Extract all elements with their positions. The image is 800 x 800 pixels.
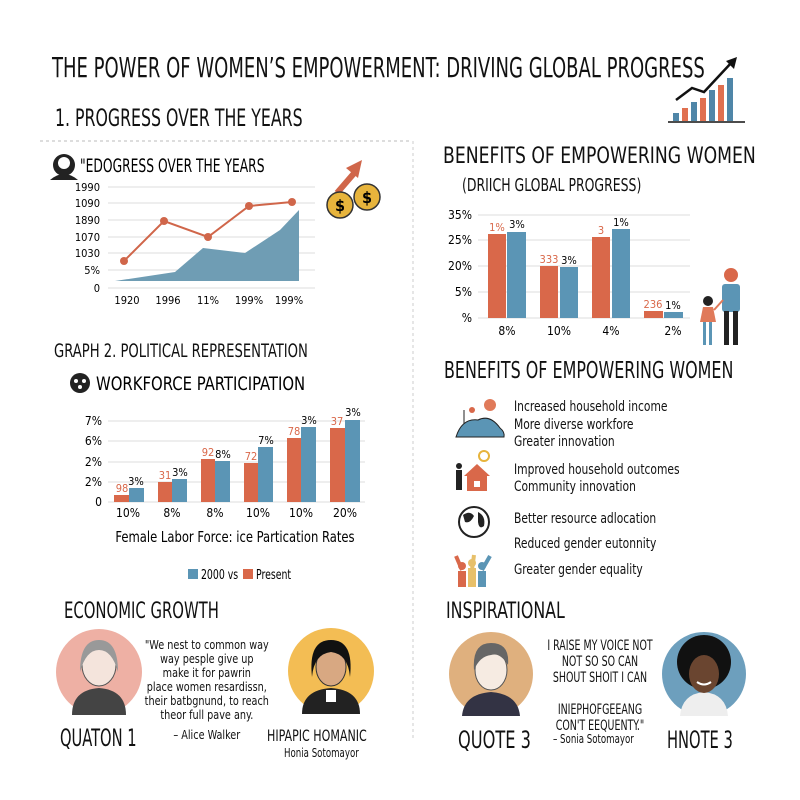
icon: woman avatar [50, 154, 78, 180]
chart: benefits bars: 10% [547, 324, 571, 338]
chart: progress line/area: "EDOGRESS OVER THE YEARS [80, 155, 265, 177]
chart: progress line/area: 11% [197, 294, 219, 307]
text: Honia Sotomayor [284, 746, 359, 760]
chart: workforce participation bars: 2000 vs [201, 567, 238, 582]
benefits list: Improved household outcomes [514, 462, 680, 478]
subheading: (DRIICH GLOBAL PROGRESS) [462, 175, 641, 196]
chart: progress line/area: 1090 [75, 197, 100, 210]
chart: workforce participation bars: 7% [85, 414, 102, 428]
chart: benefits bars: 3 [598, 224, 604, 237]
chart: workforce participation bars: 20% [333, 506, 357, 520]
chart: workforce participation bars: 3% [128, 475, 144, 488]
label: quote 3: QUOTE 3 [458, 726, 531, 754]
icon: coins with arrow: $ [335, 196, 345, 215]
chart: progress line/area: 1030 [75, 247, 100, 260]
chart: benefits bars: 2% [664, 324, 682, 338]
chart: workforce participation bars: 2% [85, 475, 102, 489]
heading: benefits list: BENEFITS OF EMPOWERING WOMEN [444, 358, 733, 384]
chart: benefits bars: 5% [455, 285, 472, 299]
chart: workforce participation bars: 0 [95, 495, 102, 509]
chart: benefits bars: 1% [489, 221, 505, 234]
chart: workforce participation bars: 31 [159, 469, 171, 482]
chart: workforce participation bars: 3% [345, 406, 361, 419]
chart: workforce participation bars: 3% [301, 414, 317, 427]
chart: benefits bars: 3% [561, 254, 577, 267]
chart: benefits bars: 3% [509, 218, 525, 231]
chart: workforce participation bars: 37 [331, 415, 343, 428]
chart: workforce participation bars: 8% [206, 506, 224, 520]
heading: graph 2: GRAPH 2. POLITICAL REPRESENTATION [54, 340, 308, 362]
label: quaton 1: QUATON 1 [60, 724, 137, 752]
heading: inspirational: INSPIRATIONAL [446, 599, 565, 624]
heading: benefits chart: BENEFITS OF EMPOWERING WOMEN [443, 144, 756, 169]
icon: coins with arrow: $ [362, 188, 372, 207]
chart: progress line/area: 199% [275, 294, 303, 307]
chart: progress line/area: 5% [84, 264, 100, 277]
chart: workforce participation bars: 2% [85, 455, 102, 469]
quote 3: I RAISE MY VOICE NOT NOT SO SO CAN SHOUT SHOIT I CAN INIEPHOFGEEANG CON'T EEQUENTY." [547, 638, 653, 734]
chart: workforce participation bars: 92 [202, 446, 214, 459]
chart: benefits bars: 333 [540, 253, 558, 266]
chart: workforce participation bars: 72 [245, 450, 257, 463]
chart: progress line/area: 1890 [75, 214, 100, 227]
benefits list: Increased household income [514, 399, 667, 415]
chart: benefits bars: 4% [602, 324, 620, 338]
label: hipapic homanic: HIPAPIC HOMANIC [267, 726, 367, 745]
chart: benefits bars: 1% [665, 299, 681, 312]
benefits list: Community innovation [514, 479, 636, 495]
chart: benefits bars: 8% [498, 324, 516, 338]
chart: progress line/area: 1996 [155, 294, 181, 307]
benefits list: Greater innovation [514, 434, 615, 450]
chart: benefits bars: 236 [644, 298, 662, 311]
chart: workforce participation bars: 10% [116, 506, 140, 520]
benefits list: Reduced gender eutonnity [514, 536, 656, 552]
chart: workforce participation bars: 7% [258, 434, 274, 447]
chart: workforce participation bars: 8% [215, 448, 231, 461]
chart: benefits bars: 35% [448, 208, 472, 222]
chart: workforce participation bars: Female Labor Force: ice Partication Rates [115, 529, 355, 546]
chart: benefits bars: % [462, 311, 472, 325]
chart: benefits bars: 1% [613, 216, 629, 229]
chart: benefits bars: 20% [448, 259, 472, 273]
quote 1: "We nest to common way way pesple give up make it for pawrin place women resardissn, their batbgnund, to reach theor full pave any. [145, 637, 269, 722]
icon: group [70, 373, 90, 393]
chart: progress line/area: 1990 [75, 181, 100, 194]
quote 1: – Alice Walker [173, 727, 240, 742]
chart: workforce participation bars: 78 [288, 425, 300, 438]
chart: workforce participation bars: Present [256, 567, 291, 582]
chart: workforce participation bars: 98 [116, 482, 128, 495]
chart: workforce participation bars: 3% [172, 466, 188, 479]
chart: progress line/area: 1070 [75, 231, 100, 244]
benefits list [514, 399, 680, 578]
chart: progress line/area: 1920 [114, 294, 140, 307]
text: – Sonia Sotomayor [553, 732, 634, 746]
chart: progress line/area: 199% [235, 294, 263, 307]
benefits list: Better resource adlocation [514, 510, 656, 526]
chart: progress line/area: 0 [94, 282, 100, 295]
benefits list: Greater gender equality [514, 562, 643, 578]
chart: workforce participation bars: 6% [85, 434, 102, 448]
chart: workforce participation bars: 10% [246, 506, 270, 520]
heading: economic growth: ECONOMIC GROWTH [64, 599, 219, 624]
chart: workforce participation bars: 8% [163, 506, 181, 520]
title: THE POWER OF WOMEN’S EMPOWERMENT: DRIVING GLOBAL PROGRESS [52, 51, 705, 84]
label: hnote 3: HNOTE 3 [667, 726, 733, 754]
section heading: progress: 1. PROGRESS OVER THE YEARS [55, 104, 303, 132]
benefits list: More diverse workfore [514, 416, 634, 432]
chart: workforce participation bars: 10% [289, 506, 313, 520]
chart: benefits bars: 25% [448, 233, 472, 247]
chart: workforce participation bars: WORKFORCE PARTICIPATION [96, 373, 305, 395]
